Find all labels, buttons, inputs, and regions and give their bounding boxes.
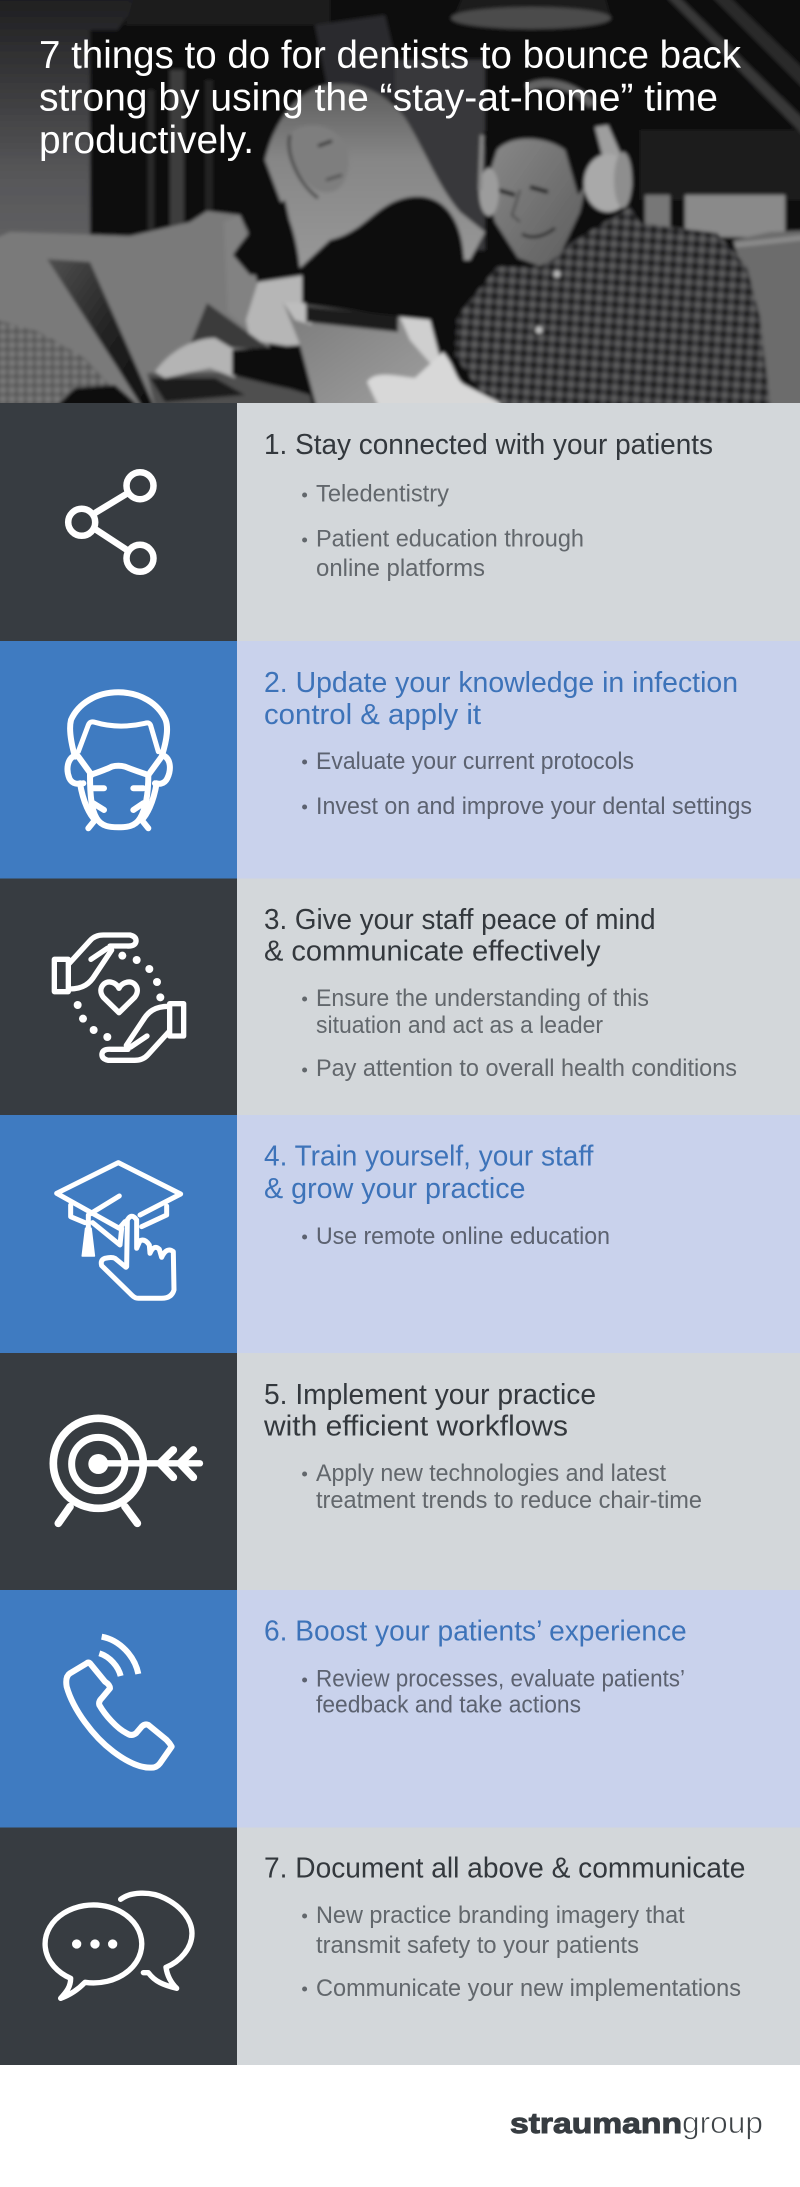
- bullets 2: Evaluate your current protocols: [316, 748, 634, 775]
- bullets 5: [302, 1460, 702, 1514]
- bullets 5: Apply new technologies and latest: [316, 1460, 666, 1487]
- man's shirt: [455, 207, 772, 420]
- bullets 7: transmit safety to your patients: [316, 1932, 639, 1959]
- blanket: [0, 320, 110, 403]
- heading 1: 1. Stay connected with your patients: [264, 429, 713, 461]
- woman's dark top and arm: [233, 197, 464, 340]
- man's face: [488, 130, 585, 266]
- heading 7: 7. Document all above & communicate: [264, 1853, 745, 1885]
- logo: straumanngroup: group: [682, 2105, 763, 2140]
- heading 2: [264, 667, 738, 731]
- title: productively.: [39, 119, 254, 162]
- right sofa: [733, 230, 800, 420]
- logo: straumanngroup: [510, 2105, 763, 2140]
- panel: 3 staff peace of mind: [0, 878, 800, 1116]
- heading 3: & communicate effectively: [264, 936, 601, 968]
- heading 3: [264, 904, 656, 968]
- icon: caring hands with heart: [54, 935, 184, 1060]
- heading 4: 4. Train yourself, your staff: [264, 1141, 594, 1173]
- bullets 1: Patient education through: [316, 526, 584, 553]
- icon: speech bubbles: [45, 1893, 192, 1998]
- icon: ringing phone: [66, 1637, 172, 1768]
- panel: 5 workflows: [0, 1353, 800, 1590]
- bullets 3: [302, 985, 737, 1082]
- bullets 6: feedback and take actions: [316, 1692, 581, 1719]
- bullets 6: Review processes, evaluate patients’: [316, 1666, 685, 1693]
- heading 2: 2. Update your knowledge in infection: [264, 667, 738, 699]
- panel: 1 stay connected: [0, 403, 800, 641]
- panel: 6 patient experience: [0, 1590, 800, 1828]
- heading 5: with efficient workflows: [263, 1411, 568, 1443]
- laptop: [146, 371, 313, 403]
- bullets 1: online platforms: [316, 555, 485, 582]
- bullets 7: New practice branding imagery that: [316, 1902, 685, 1929]
- bullets 2: Invest on and improve your dental settings: [316, 793, 752, 820]
- left sofa: [0, 208, 272, 403]
- bullets 7: Communicate your new implementations: [316, 1975, 741, 2002]
- title: [39, 34, 741, 162]
- woman's hand and sleeve: [155, 338, 235, 378]
- heading 5: 5. Implement your practice: [264, 1379, 596, 1411]
- heading 3: 3. Give your staff peace of mind: [264, 904, 656, 936]
- heading 4: & grow your practice: [264, 1173, 526, 1205]
- panel: 7 document and communicate: [0, 1828, 800, 2065]
- bullets 1: [302, 481, 584, 582]
- photo: couple using laptop and tablet on a sofa: [0, 0, 800, 420]
- bullets 6: [302, 1666, 685, 1719]
- bullets 3: Pay attention to overall health conditions: [316, 1055, 737, 1082]
- heading 5: [263, 1379, 596, 1443]
- icon: share network: [68, 472, 154, 572]
- panel: 4 training: [0, 1115, 800, 1353]
- white pillow: [246, 275, 312, 350]
- woman's hair: [265, 84, 485, 272]
- icon: face with mask: [67, 692, 170, 828]
- bullets 3: situation and act as a leader: [316, 1012, 603, 1039]
- lamp: [455, 0, 610, 15]
- headphones: [527, 83, 592, 105]
- bullets 2: [302, 748, 752, 820]
- bullets 4: Use remote online education: [316, 1223, 610, 1250]
- bullets 1: Teledentistry: [316, 481, 450, 508]
- bullets 7: [302, 1902, 741, 2002]
- man's hand: [366, 348, 503, 403]
- icon: target with arrow: [53, 1418, 200, 1523]
- heading 2: control & apply it: [264, 699, 481, 731]
- title: 7 things to do for dentists to bounce back: [39, 34, 741, 77]
- heading 4: [264, 1141, 594, 1205]
- heading 6: 6. Boost your patients’ experience: [264, 1616, 687, 1648]
- dark patterned cushion: [190, 303, 272, 350]
- bullets 3: Ensure the understanding of this: [316, 985, 649, 1012]
- icon: graduation cap with pointing hand: [57, 1163, 181, 1298]
- bullets 5: treatment trends to reduce chair-time: [316, 1487, 702, 1514]
- logo: straumanngroup: straumann: [510, 2108, 682, 2140]
- title: strong by using the “stay-at-home” time: [39, 76, 718, 120]
- panel: 2 infection control: [0, 641, 800, 879]
- tablet: [284, 301, 442, 403]
